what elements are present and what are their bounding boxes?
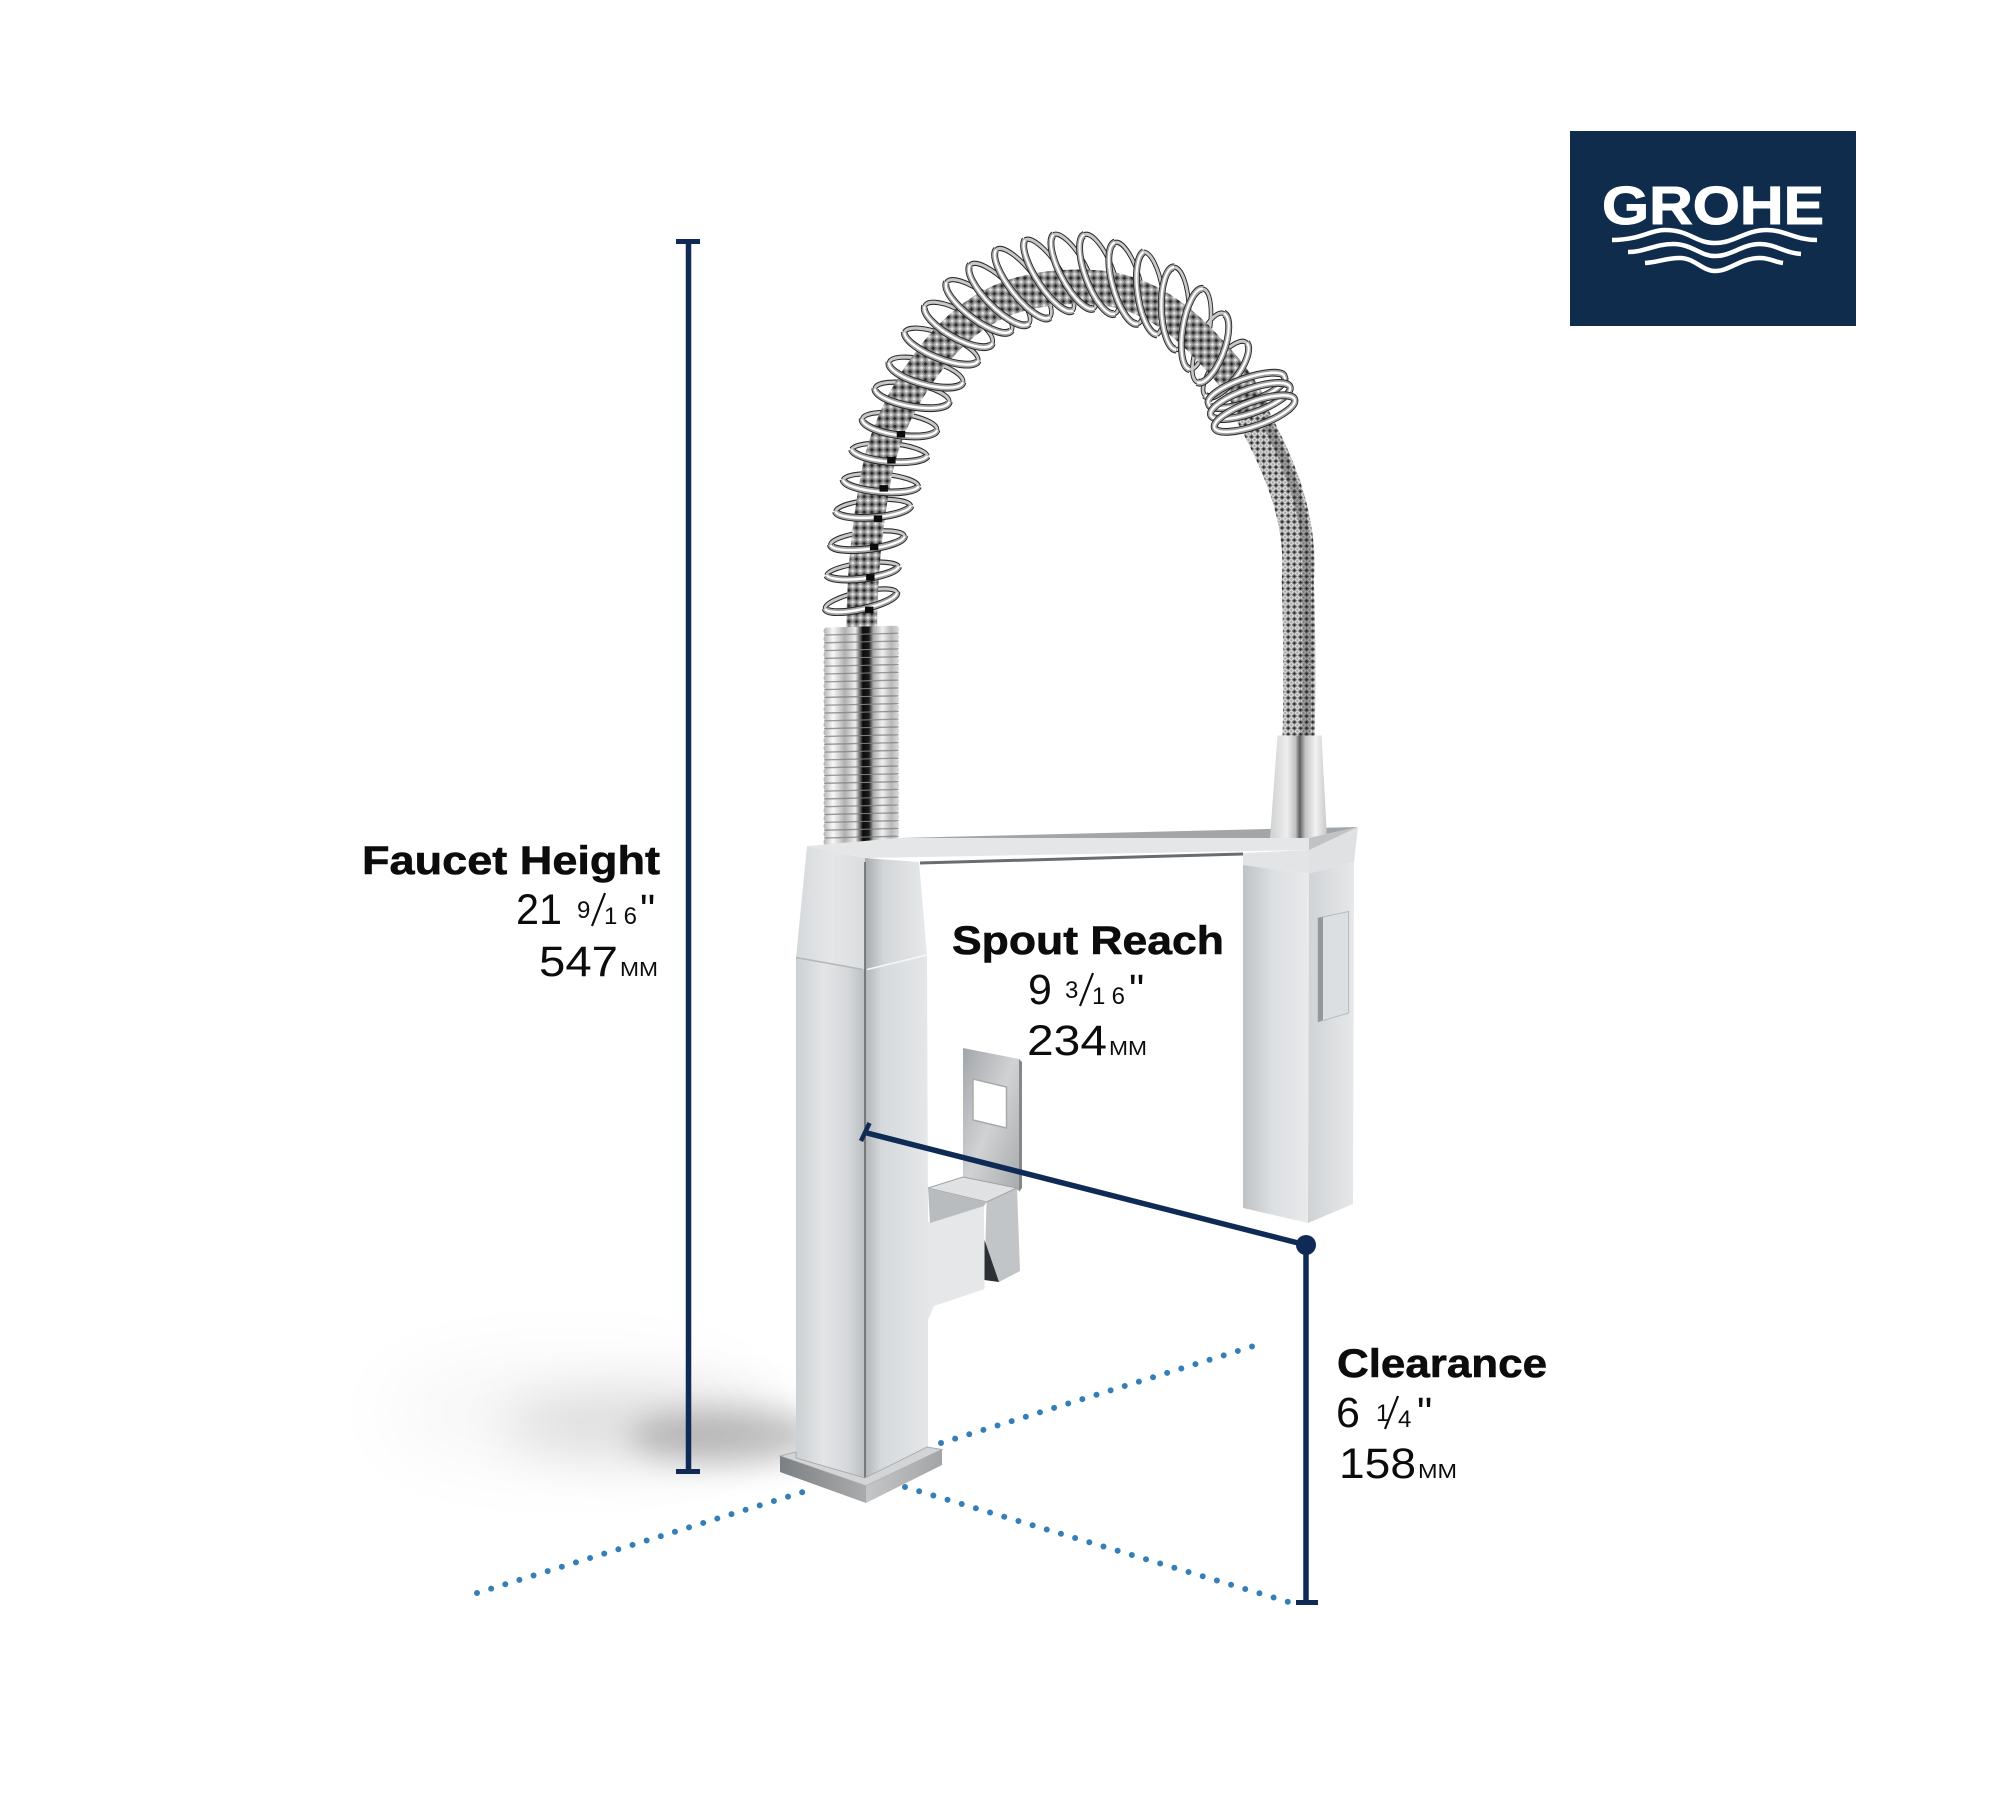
- label: clearance: Clearance: [1337, 1342, 1547, 1386]
- faucet: main body: [796, 846, 986, 1478]
- faucet: [780, 234, 1358, 1503]
- label: spout reach: 3: [1065, 977, 1078, 1004]
- logo wordmark: GROHE: [1602, 176, 1824, 236]
- label: faucet height: 16: [604, 903, 637, 930]
- label: spout reach: 9: [1028, 966, 1052, 1014]
- label: spout reach: MM: [1109, 1038, 1147, 1060]
- floor shadow: [380, 1364, 830, 1463]
- label: clearance: [1336, 1342, 1547, 1488]
- faucet: base plate: [780, 1447, 942, 1503]
- faucet: pull-out spray head: [1243, 827, 1358, 1223]
- label: faucet height: [362, 839, 660, 986]
- faucet: right connector collar: [1270, 736, 1327, 838]
- dimension: spout reach line: [861, 1123, 1306, 1245]
- faucet: bridge top face: [899, 827, 1358, 838]
- label: faucet height: Faucet Height: [362, 839, 660, 883]
- label: faucet height: 547: [539, 938, 618, 986]
- label: faucet height: 9: [577, 897, 590, 924]
- label: clearance: MM: [1418, 1461, 1457, 1483]
- hose inside coil: [862, 287, 1255, 634]
- label: spout reach: 16: [1092, 983, 1125, 1010]
- dimension: faucet height line: [676, 241, 700, 1472]
- faucet: lever plate: [963, 1048, 1022, 1192]
- faucet: spring coil and hose: [824, 234, 1307, 842]
- label: clearance: 1: [1376, 1400, 1389, 1427]
- hose to pull-out spray: [1249, 408, 1299, 742]
- faucet: spray button: [1318, 912, 1349, 1022]
- label: clearance: 4: [1398, 1406, 1411, 1433]
- label: faucet height: ": [640, 886, 655, 934]
- faucet: lever lower section: [928, 1177, 1020, 1282]
- floor guide: right dotted line: [905, 1487, 1292, 1603]
- label: spout reach: ": [1129, 966, 1144, 1014]
- logo waves: [1612, 230, 1817, 271]
- spring front strands: [825, 235, 1295, 612]
- floor guide: left dotted line: [477, 1488, 816, 1593]
- label: clearance: ": [1417, 1389, 1432, 1437]
- label: spout reach: 234: [1027, 1017, 1107, 1065]
- label: faucet height: 21: [516, 886, 562, 934]
- tight coil at the base: [824, 629, 899, 842]
- hose shadow stripe: [1264, 417, 1307, 742]
- label: clearance: 158: [1339, 1440, 1416, 1488]
- label: faucet height: MM: [620, 959, 658, 981]
- label: spout reach: Spout Reach: [952, 919, 1224, 963]
- dimension: clearance line: [1296, 1235, 1318, 1603]
- label: spout reach: [952, 919, 1224, 1065]
- dark reflections on strands: [865, 434, 905, 610]
- logo: GROHE: [1570, 131, 1856, 326]
- faucet: bridge front strip: [807, 838, 1309, 863]
- floor guide: back dotted line: [941, 1345, 1257, 1443]
- label: clearance: 6: [1336, 1389, 1360, 1437]
